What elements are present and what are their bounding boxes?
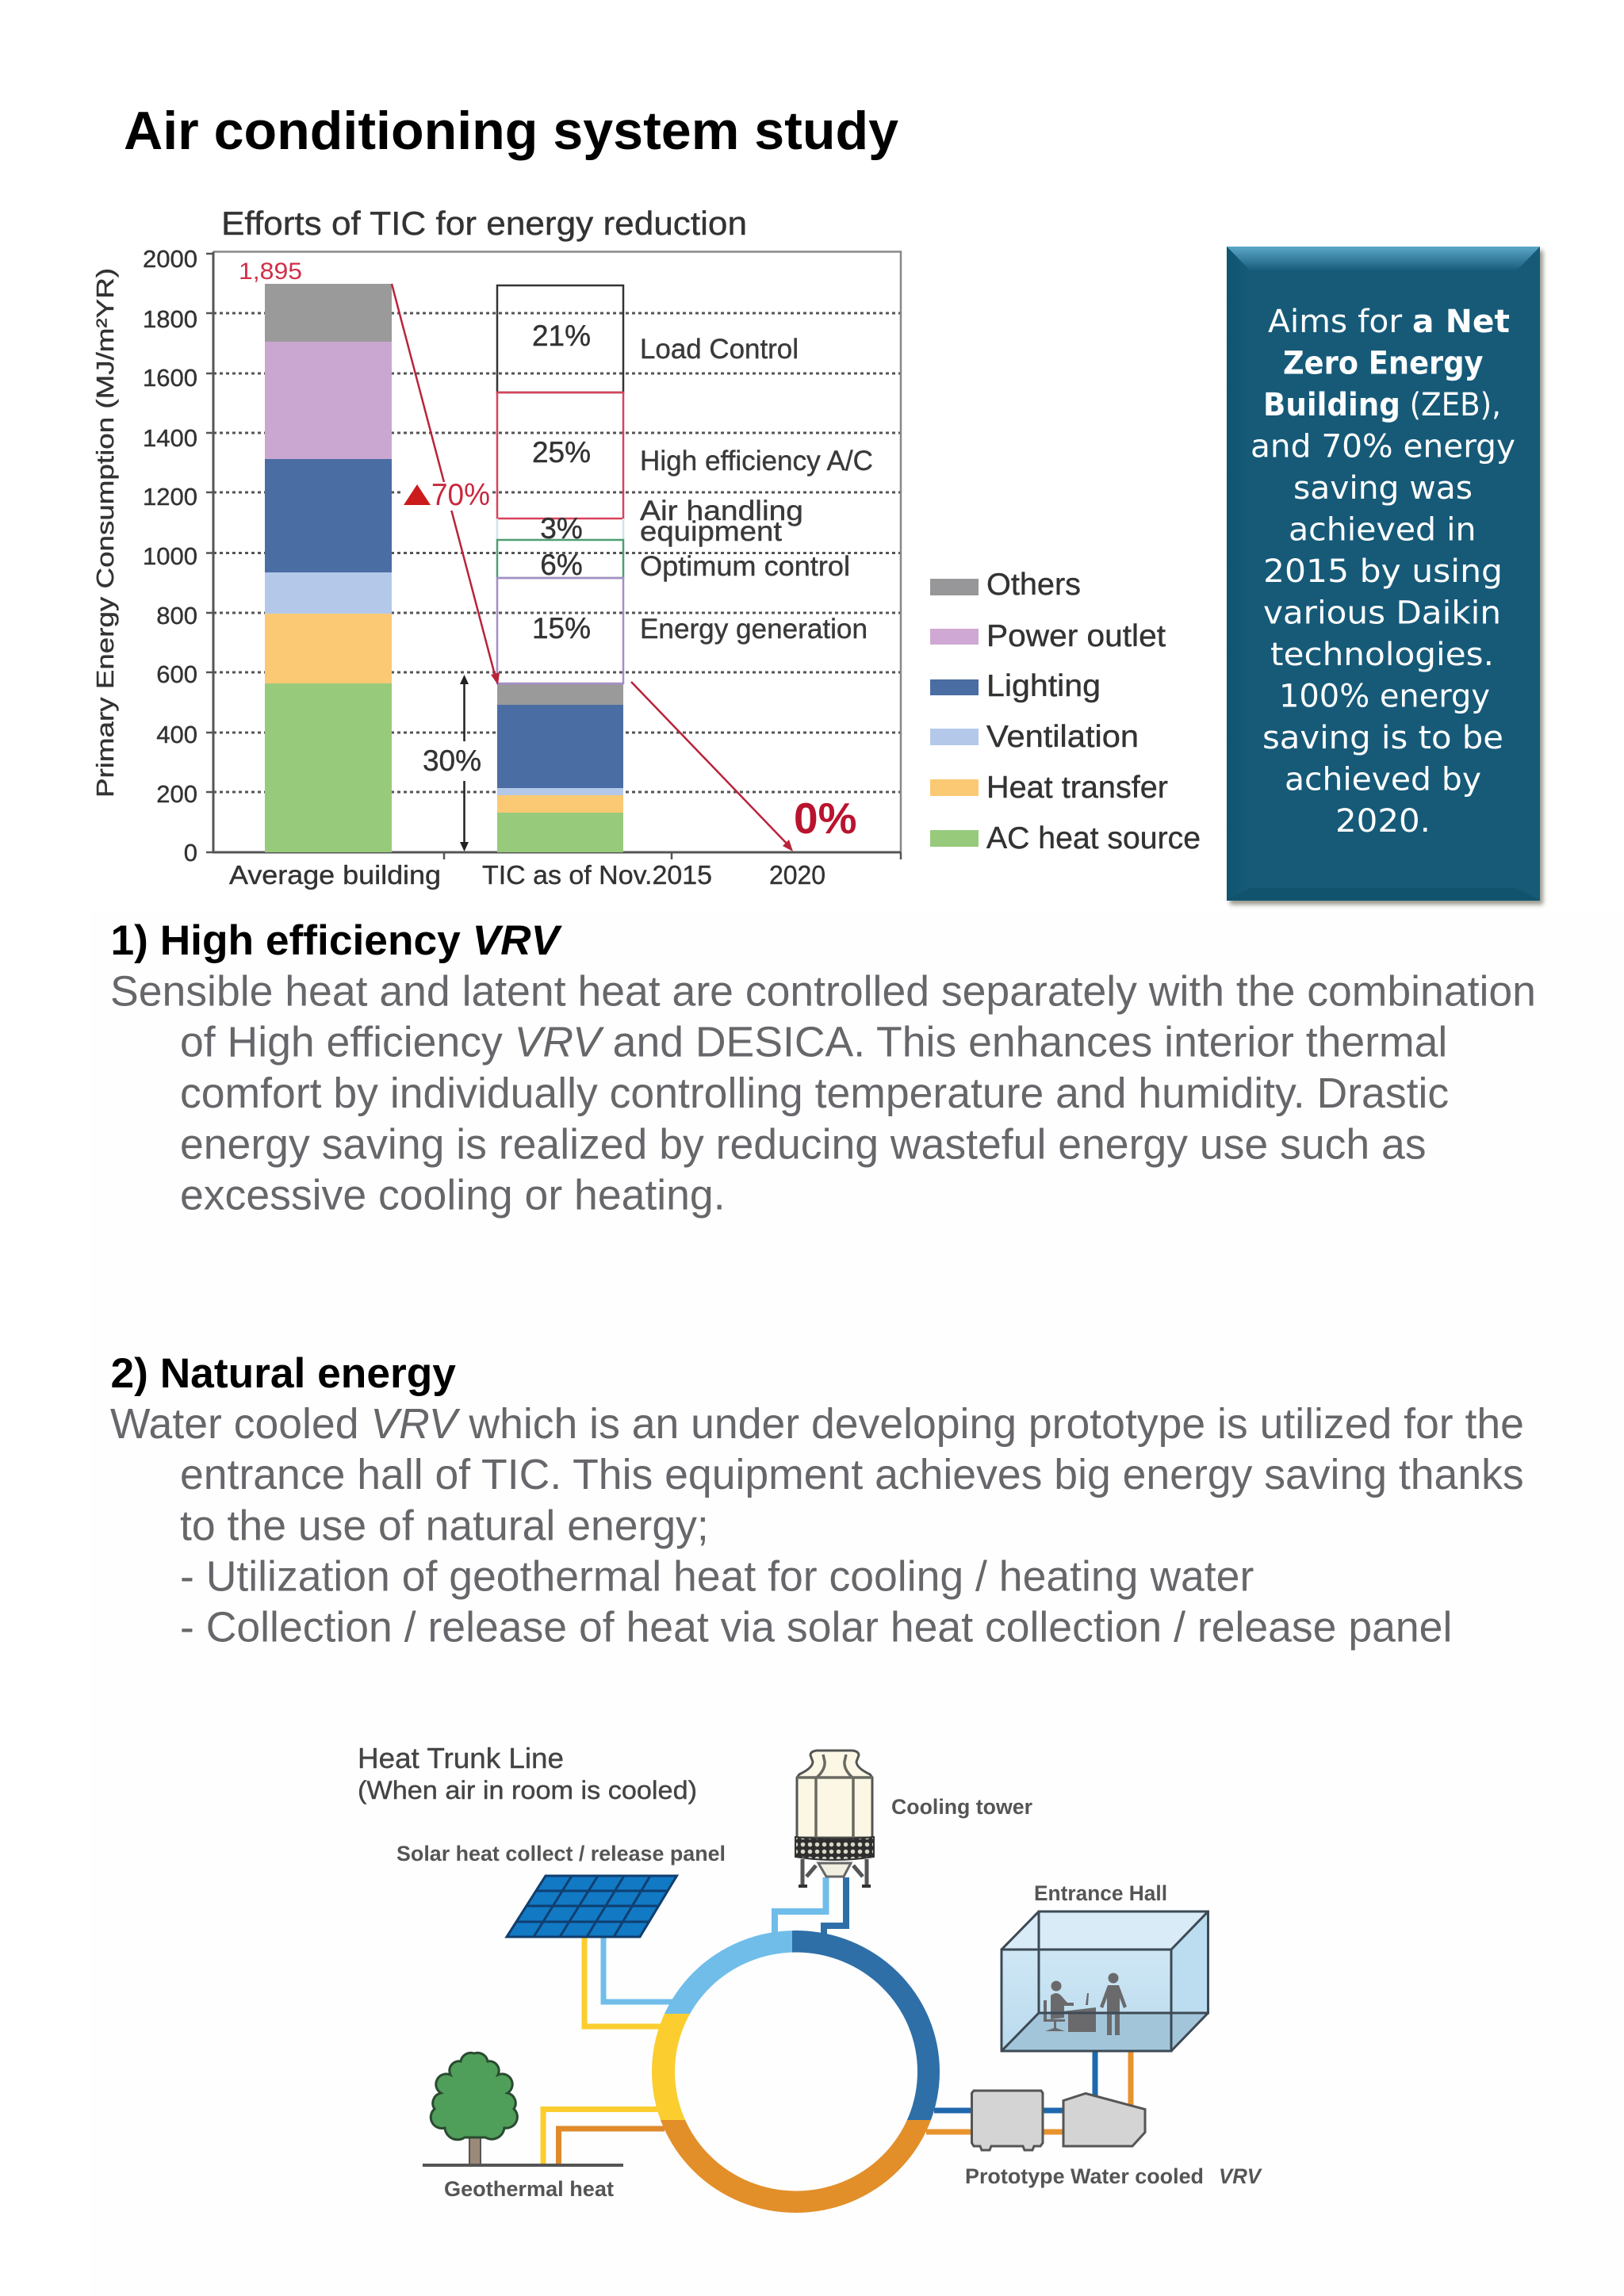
callout text: Aims for a Net [1268,304,1510,340]
measure labels [640,334,873,645]
x axis labels: 2020 [769,860,825,890]
label: prototype water cooled VRV: VRV [1219,2164,1262,2188]
label: geothermal heat: Geothermal heat [444,2177,614,2201]
y axis tick labels: 1800 [143,305,197,333]
callout text: Zero Energy [1283,346,1483,382]
section 1 body text: excessive cooling or heating. [180,1172,726,1219]
y axis tick labels: 1600 [143,364,197,392]
section 1 heading: 1) High efficiency VRV [111,917,563,964]
section 1 body text: Sensible heat and latent heat are controlled separately with the combination [110,969,1536,1015]
measure labels: High efficiency A/C [640,446,873,476]
percentage labels [532,320,591,645]
double arrow: 30% [423,675,481,851]
label: 70% reduction: 70% [431,478,490,512]
y axis tick labels: 1200 [143,483,197,511]
callout text: and 70% energy [1251,428,1515,465]
legend: Lighting [986,669,1101,703]
icon: prototype water cooled VRV units [972,2091,1145,2150]
section 2 body text: entrance hall of TIC. This equipment achieves big energy saving thanks [180,1452,1524,1498]
legend: Others [986,568,1081,602]
callout text: saving is to be [1262,720,1503,756]
section 2 body text: Water cooled VRV which is an under developing prototype is utilized for the [110,1401,1524,1448]
callout text: saving was [1293,470,1473,507]
red arrow: to 0% in 2020 [631,682,793,851]
y axis tick labels [143,245,197,867]
legend: AC heat source [986,821,1201,855]
callout text: achieved in [1289,512,1477,549]
section 1 body text: of High efficiency VRV and DESICA. This enhances interior thermal [180,1020,1447,1066]
label: entrance hall: Entrance Hall [1034,1881,1167,1905]
y axis tick labels: 0 [184,839,197,867]
label: solar panel: Solar heat collect / release panel [396,1842,726,1866]
callout text: Building (ZEB), [1263,387,1501,423]
y axis tick labels: 2000 [143,245,197,273]
diagram title [358,1742,697,1804]
section 1 body text: energy saving is realized by reducing wasteful energy use such as [180,1121,1427,1169]
diagram title: Heat Trunk Line [358,1742,564,1774]
measure labels: equipment [640,516,782,547]
heat trunk ring [652,1931,940,2213]
legend: Heat transfer [986,771,1168,805]
legend [930,568,1201,855]
diagram: heat trunk line [358,1742,1262,2223]
y axis tick labels: 600 [156,660,197,688]
percentage labels: 6% [540,549,583,581]
section 2 heading: 2) Natural energy [111,1350,456,1397]
callout text: 100% energy [1279,679,1490,715]
y axis tick labels: 1400 [143,424,197,452]
bar: TIC as of Nov.2015 [497,683,623,852]
x axis labels: TIC as of Nov.2015 [482,860,712,890]
percentage labels: 3% [540,512,583,545]
diagram title: (When air in room is cooled) [358,1776,697,1804]
measure labels: Load Control [640,334,799,365]
x axis labels [229,860,825,890]
measure labels: Air handling [640,496,803,526]
y axis title: Primary Energy Consumption (MJ/m²YR) [91,268,119,798]
label: 70% reduction [400,478,492,512]
icon: cooling tower [795,1751,874,1886]
section 1: High efficiency VRV [110,917,1536,1219]
icon: tree and ground [423,2053,623,2165]
pipes [543,1877,1131,2165]
red arrow: 70% reduction [392,284,500,685]
measure labels: Optimum control [640,551,850,582]
callout text: achieved by [1285,761,1481,798]
callout text [1251,304,1515,840]
chart title: Efforts of TIC for energy reduction [221,205,747,242]
double arrow: 30%: 30% [423,744,481,777]
percentage labels: 21% [532,320,591,352]
callout text: 2020. [1335,803,1431,840]
label: 0%: 0% [794,794,856,843]
icon: entrance hall [1002,1911,1208,2051]
label: prototype water cooled VRV: Prototype Water cooled [965,2164,1204,2188]
measure labels: Energy generation [640,614,868,645]
section 2 body text: - Collection / release of heat via solar heat collection / release panel [180,1605,1452,1651]
section 2 body text: - Utilization of geothermal heat for cooling / heating water [180,1554,1254,1600]
title: Air conditioning system study [124,101,898,161]
bar chart: efforts of TIC for energy reduction [91,205,901,890]
label: cooling tower: Cooling tower [891,1795,1032,1819]
reduction boxes [497,285,623,683]
percentage labels: 15% [532,612,591,645]
callout panel: Net Zero Energy Building [1227,247,1543,905]
section 2 body text: to the use of natural energy; [180,1503,709,1549]
callout text: 2015 by using [1263,553,1503,590]
section 1 body text: comfort by individually controlling temperature and humidity. Drastic [180,1070,1449,1117]
value 1,895: 1,895 [239,258,302,285]
section 2 body text [110,1401,1524,1651]
y axis tick labels: 800 [156,602,197,629]
legend: Ventilation [986,720,1139,754]
y axis tick labels: 1000 [143,542,197,570]
section 1 body text [110,969,1536,1219]
people in hall [1044,1973,1127,2035]
y axis tick labels: 200 [156,780,197,808]
callout text: technologies. [1270,637,1494,673]
callout text: various Daikin [1263,595,1501,631]
icon: solar panel [507,1876,677,1937]
percentage labels: 25% [532,436,591,469]
y axis tick labels: 400 [156,721,197,748]
bar: average building [265,284,392,852]
section 2: Natural energy [110,1350,1524,1651]
x axis labels: Average building [229,860,441,890]
legend: Power outlet [986,619,1166,653]
